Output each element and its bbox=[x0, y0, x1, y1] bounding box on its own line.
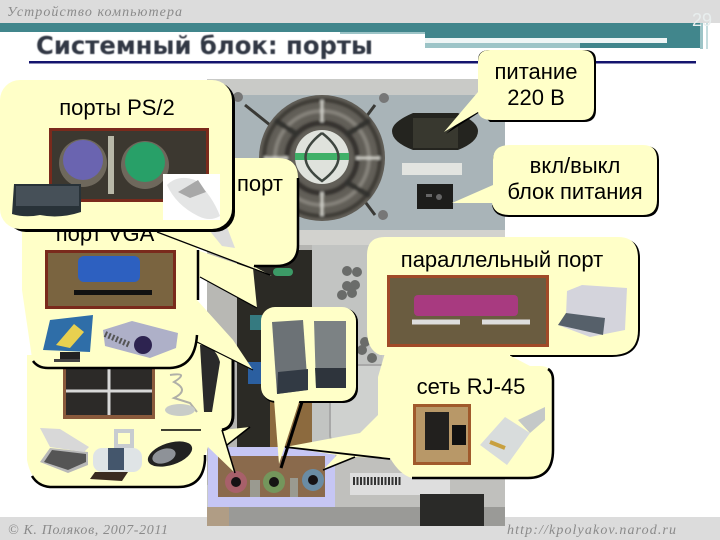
icon: monitor bbox=[43, 315, 93, 362]
slide header band bbox=[0, 0, 720, 49]
icon: keyboard bbox=[12, 184, 81, 216]
RJ-45 port photo bbox=[413, 404, 471, 465]
icon: microphone bbox=[165, 345, 220, 416]
vent holes bbox=[337, 266, 377, 363]
icon: speaker left bbox=[272, 320, 308, 394]
parallel port photo bbox=[387, 275, 549, 347]
icon: RJ-45 plug bbox=[480, 407, 545, 465]
VGA label: порт VGA bbox=[56, 221, 155, 246]
callout: USB ports bbox=[27, 335, 250, 487]
icon: projector bbox=[103, 321, 178, 358]
label: сеть RJ-45 bbox=[417, 374, 525, 399]
slide number: 29 bbox=[692, 10, 712, 30]
icon: mouse white bbox=[204, 214, 235, 248]
gray expansion slot bbox=[207, 277, 237, 350]
audio ports panel bbox=[208, 447, 335, 507]
VGA port photo bbox=[45, 250, 176, 309]
icon: speaker right bbox=[314, 321, 346, 388]
title underline bbox=[29, 61, 696, 64]
label: порты PS/2 bbox=[59, 95, 175, 120]
callout: PS/2 ports bbox=[0, 80, 235, 232]
callout: VGA port bbox=[22, 210, 270, 370]
label: питание bbox=[495, 59, 577, 84]
website: http://kpolyakov.narod.ru bbox=[507, 523, 676, 538]
PS/2 port photo bbox=[49, 128, 209, 202]
computer rear photo bbox=[200, 79, 505, 526]
label: параллельный порт bbox=[401, 247, 603, 272]
power switch bbox=[417, 184, 453, 209]
icon: printer bbox=[90, 431, 142, 481]
label: вкл/выкл bbox=[530, 153, 620, 178]
callout: power 220 V bbox=[444, 50, 596, 134]
copyright: © К. Поляков, 2007-2011 bbox=[8, 523, 168, 538]
callout: serial port bbox=[157, 158, 298, 276]
icon: scanner bbox=[40, 428, 89, 473]
callout: power switch: блок питания bbox=[507, 179, 643, 204]
header caption: Устройство компьютера bbox=[7, 5, 182, 20]
USB port photo bbox=[63, 360, 155, 419]
power socket bbox=[392, 113, 478, 150]
icon: white mouse bbox=[163, 174, 220, 220]
footer band bbox=[0, 517, 720, 540]
callout: parallel port bbox=[367, 237, 640, 357]
label: порт bbox=[237, 171, 283, 196]
barcode label bbox=[350, 473, 450, 495]
fan bbox=[233, 92, 389, 221]
icon: mouse bbox=[145, 436, 195, 472]
callout: speakers bbox=[261, 307, 358, 468]
callout: power switch bbox=[452, 145, 659, 217]
icon: laser printer bbox=[558, 285, 627, 337]
callout: power 220 V: 220 В bbox=[507, 85, 565, 110]
title: Системный блок: порты bbox=[36, 31, 373, 60]
callout: RJ-45 network bbox=[285, 353, 553, 478]
